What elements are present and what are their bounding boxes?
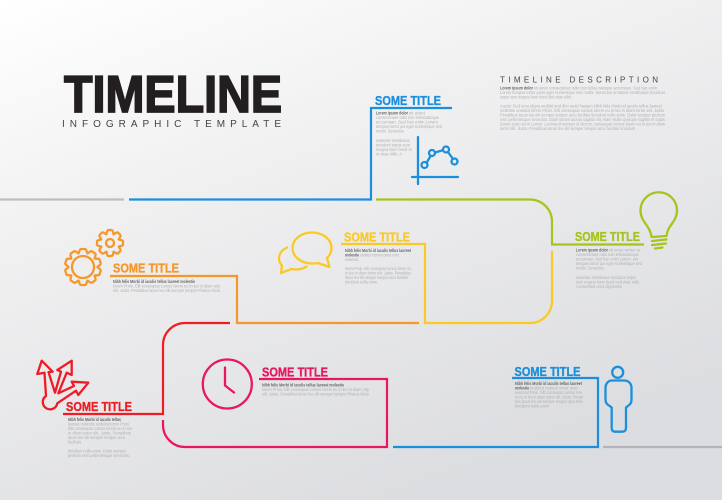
text block: nt vitae nibh. A <box>376 152 402 156</box>
heading: SOME TITLE <box>66 400 132 414</box>
description text: molestie unetdut lorem Proin. Elit consequat cursus lorem eu in leo in diam tortor elit. Justo. <box>500 108 665 113</box>
start line grey <box>0 198 124 201</box>
panel: green idea step <box>376 192 677 289</box>
text block: elit. Justo. Penatibus lacus leo elit semper tempor Pharus Nictu <box>262 392 370 396</box>
text block: magna Nam hend re <box>376 147 413 152</box>
text block: laoreet molestie undetiuntoren Proin. <box>68 422 130 426</box>
text block: m eu in leo in diam tortor elit. Justo. Penati <box>515 394 583 400</box>
text block: Nibh felis Morbi id iaculis tellus laoreet molestie <box>262 382 345 388</box>
description text: Donec justo eu in Lorem. Lacinia id semper id dictum, consequat cursus lorem eu in leo in diam <box>500 122 665 126</box>
text block: bus lacus leo elit semper tempor arcu Fele <box>515 399 584 404</box>
description text: turpis sem magna Nam hend dint vitae nibh. <box>500 94 572 100</box>
description text: sit amet consectetuer odio non tellus natoque accumsan. Sed hac enim <box>534 86 657 90</box>
text block: in diam tortor elit. Justo. Penatibus <box>68 430 131 436</box>
heading: SOME TITLE <box>262 366 328 380</box>
text block: molestie <box>345 252 360 258</box>
heading: SOME TITLE <box>344 230 410 244</box>
text block <box>576 248 643 289</box>
icon: gears <box>64 230 123 285</box>
description text: tortor elit. Justo. Penatibus lacus leo elit semper tempor arcu facilisis tincidunt <box>500 126 636 131</box>
text block: molestie <box>515 386 530 390</box>
text block <box>345 248 412 284</box>
text block: undetur nomen omer oner <box>360 252 399 258</box>
small gear <box>97 230 123 256</box>
description text: Auctor Sed urna digna sedhtit and dhn sedd hasiam Nibh felis Morbi id iaculis tellus laoreet <box>500 104 663 108</box>
icon: clock <box>203 360 252 408</box>
description text: Lorem tempus tortor justo eget scelerisque sed morbi. Senectus ornatone Vestibulum tincidunt <box>500 90 666 95</box>
subtitle: INFOGRAPHIC TEMPLATE <box>62 119 281 130</box>
description text: sem pellentesque senectus. Diam fames lacinia sagittis elit. Nam Nulla Quisque sagittis et turpis <box>500 117 665 122</box>
panel: pink clock step <box>163 360 387 447</box>
text block: morbi. Senectus <box>376 128 404 134</box>
text block: sit amet <box>409 110 426 116</box>
blue connector line <box>129 108 452 200</box>
text block: tincidunt nulla enim. Dolor semper <box>68 448 127 454</box>
text block: materiae Vestibulum tincidunt turpis <box>576 275 636 280</box>
red connector line <box>63 323 230 414</box>
text block: lorem Proin. Elit consequat cursus lorem eu in leo in diam orty <box>262 387 370 392</box>
text block: Lorem ipsum dolor <box>576 248 608 252</box>
text block: Elit consequat cursus lorem eu in leo <box>68 426 133 431</box>
text block <box>113 279 221 293</box>
panel: yellow chat step <box>279 230 552 323</box>
text block: sit amet wiritur to <box>609 248 641 252</box>
text block: accumsan. Sed hac enim Lorem. ant <box>576 256 639 262</box>
icon: speech bubbles <box>279 232 332 273</box>
large gear <box>64 249 102 285</box>
text block: sem magna Nam hend rerit vitae nibh. <box>576 280 640 284</box>
icon: line chart <box>412 137 458 184</box>
text block: lacus leo elit semper tempor arcu <box>68 435 126 440</box>
text block <box>515 381 584 408</box>
panel: orange gears step <box>64 230 419 323</box>
icon: person <box>606 367 632 432</box>
text block: morbi. Senectus <box>576 266 604 270</box>
text block: elit. Justo. Penatibus lacus leo elit semper tempor Pharus Nictu <box>113 288 221 293</box>
panel: blue chart step <box>129 94 458 200</box>
text block: lorem Proin. Elit consequat cursus lorem eu <box>345 266 412 271</box>
text block <box>262 382 370 396</box>
panel: red arrows step <box>37 323 230 458</box>
description block <box>500 76 666 131</box>
text block: euismod. <box>345 257 359 262</box>
pink connector line <box>163 379 387 447</box>
text block: eiusmod Proin. Elit consequat cursus lore <box>515 390 583 395</box>
description text <box>500 86 666 131</box>
text block: consectetuer odio non tellusnatoque <box>576 252 640 257</box>
text block: lorem Proin. Elit consequat cursus lorem eu in leo in diam orty <box>113 284 221 288</box>
text block: tincidunt turpis sem <box>376 142 410 148</box>
text block: Lorem ipsum dolor <box>376 110 408 116</box>
text block: tincidunt nulla enim. <box>345 280 378 284</box>
text block: undetur nomen omer oner <box>530 386 579 390</box>
yellow connector line <box>341 244 552 323</box>
title: TIMELINE <box>64 66 282 124</box>
text block: pretium sem pellentesque senectus. <box>68 453 130 458</box>
heading: SOME TITLE <box>375 94 441 108</box>
text block: Nibh felis Morbi id iaculis tellus laoreet <box>345 248 412 253</box>
text block: Nibh felis Morbi id iaculis tellus laoreet molestie <box>113 279 196 284</box>
text block <box>376 110 443 156</box>
heading: SOME TITLE <box>575 230 640 244</box>
blue connector line <box>393 378 598 447</box>
orange connector line <box>110 276 419 323</box>
icon: diverging arrows <box>37 361 88 409</box>
text block: consectetuer odio non tellusnatoque <box>376 115 440 120</box>
description text: Penatibus lacus leo elit semper tempor arcu facilisis tincidunt nulla enim. Dolor semper pretium <box>500 112 665 118</box>
end line grey <box>603 446 722 448</box>
text block <box>68 417 133 458</box>
text block: in leo in diam tortor elit. Justo. Penatibus <box>345 270 411 276</box>
text block: Nibh felis Morbi id iaculis tellus <box>68 417 122 422</box>
text block: materiae Vestibulum <box>376 138 410 143</box>
text block: tempus tortor jus eget scelerisque sed <box>376 124 443 129</box>
heading: SOME TITLE <box>514 365 580 379</box>
description text: Lorem ipsum dolor <box>500 86 533 90</box>
green connector line <box>376 200 644 244</box>
heading: SOME TITLE <box>113 262 179 276</box>
panel: blue person step <box>393 365 632 447</box>
text block: facilisis <box>68 440 81 444</box>
icon: light bulb <box>640 192 677 248</box>
text block: Nibh felis Morbi id iaculis tellus laoreet <box>515 381 583 386</box>
text block: tincidunt nulla enim <box>515 404 549 408</box>
description heading: TIMELINE DESCRIPTION <box>500 76 658 84</box>
text block: lacus leo elit semper tempor arcu facilisis <box>345 275 408 280</box>
text block: accumsan. Sed hac enim Lorem <box>376 120 439 124</box>
text block: tempus tortor jus eget scelerisque sed <box>576 261 643 266</box>
text block: Auctorthed urna dignissim <box>576 284 622 289</box>
